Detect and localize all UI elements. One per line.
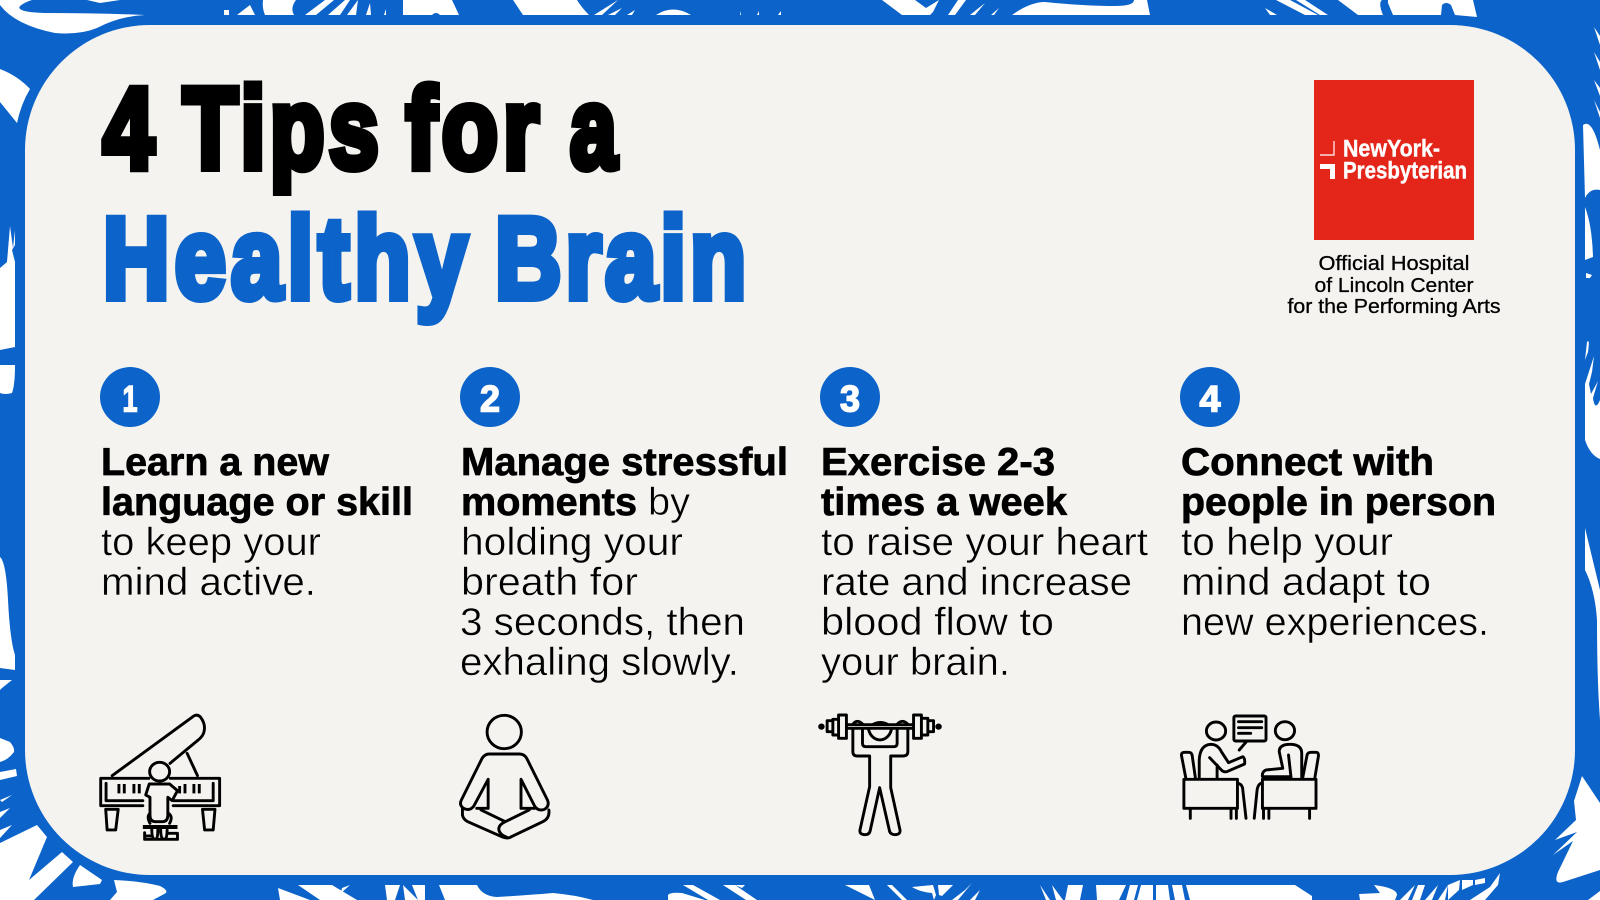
number badge 4: 4 <box>1200 378 1221 420</box>
tip 2 text: moments <box>461 481 637 524</box>
tip 2 text: breath for <box>461 561 638 604</box>
tip 3 text: Exercise 2-3 <box>821 441 1055 484</box>
number badge 3: 3 <box>840 378 860 420</box>
tip 3 text <box>821 441 1148 684</box>
icon: pianist at grand piano <box>101 715 220 839</box>
icon: person meditating <box>460 715 549 838</box>
tip 2 text: holding your <box>461 521 683 564</box>
title: Brain <box>495 195 746 323</box>
tip 1 text: to keep your <box>101 521 321 564</box>
tip 2 text: Manage stressful <box>461 441 788 484</box>
number badge 3 <box>820 367 880 427</box>
logo caption: Official Hospital <box>1318 253 1470 275</box>
title: a <box>570 65 618 193</box>
title <box>103 64 746 323</box>
number badge 2 <box>460 367 520 427</box>
tip 3 text: to raise your heart <box>821 521 1148 564</box>
title: for <box>406 65 539 193</box>
tip 2 text: 3 seconds, then <box>460 601 745 644</box>
number badge 1 <box>100 367 160 427</box>
tip 2 <box>460 367 788 838</box>
logo caption <box>1288 253 1500 318</box>
logo: NewYork-Presbyterian: Presbyterian <box>1343 158 1467 184</box>
tip 4 <box>1180 367 1496 818</box>
tip 3 text: rate and increase <box>821 561 1132 604</box>
logo caption: for the Performing Arts <box>1288 296 1500 318</box>
tip 1 text: Learn a new <box>101 441 330 484</box>
tip 4 text: people in person <box>1181 481 1496 524</box>
title: Healthy <box>103 195 467 323</box>
tip 3 text: your brain. <box>821 641 1010 684</box>
icon: person lifting barbell <box>820 715 940 835</box>
logo caption: of Lincoln Center <box>1314 275 1474 297</box>
tip 1 text: mind active. <box>101 561 316 604</box>
number badge 1: 1 <box>122 378 138 420</box>
tip 3 text: times a week <box>821 481 1068 524</box>
tip 1 text: language or skill <box>101 481 413 524</box>
number badge 4 <box>1180 367 1240 427</box>
logo: NewYork-Presbyterian <box>1314 80 1474 240</box>
tip 4 text: mind adapt to <box>1181 561 1431 604</box>
title: Tips <box>183 64 379 193</box>
title: 4 <box>103 65 154 193</box>
tip 4 text <box>1181 441 1496 644</box>
tip 2 text <box>460 441 788 684</box>
tip 4 text: to help your <box>1181 521 1393 564</box>
logo: NewYork-Presbyterian: NewYork- <box>1343 136 1440 162</box>
tip 1 text <box>101 441 413 604</box>
tip 3 <box>820 367 1148 835</box>
icon: two people talking in armchairs <box>1181 716 1319 818</box>
tip 3 text: blood flow to <box>821 601 1054 644</box>
tip 2 text: exhaling slowly. <box>460 641 739 684</box>
number badge 2: 2 <box>480 378 500 420</box>
tip 4 text: new experiences. <box>1181 601 1489 644</box>
tip 1 <box>100 367 413 839</box>
tip 4 text: Connect with <box>1181 441 1434 484</box>
tip 2 text: by <box>648 481 691 524</box>
